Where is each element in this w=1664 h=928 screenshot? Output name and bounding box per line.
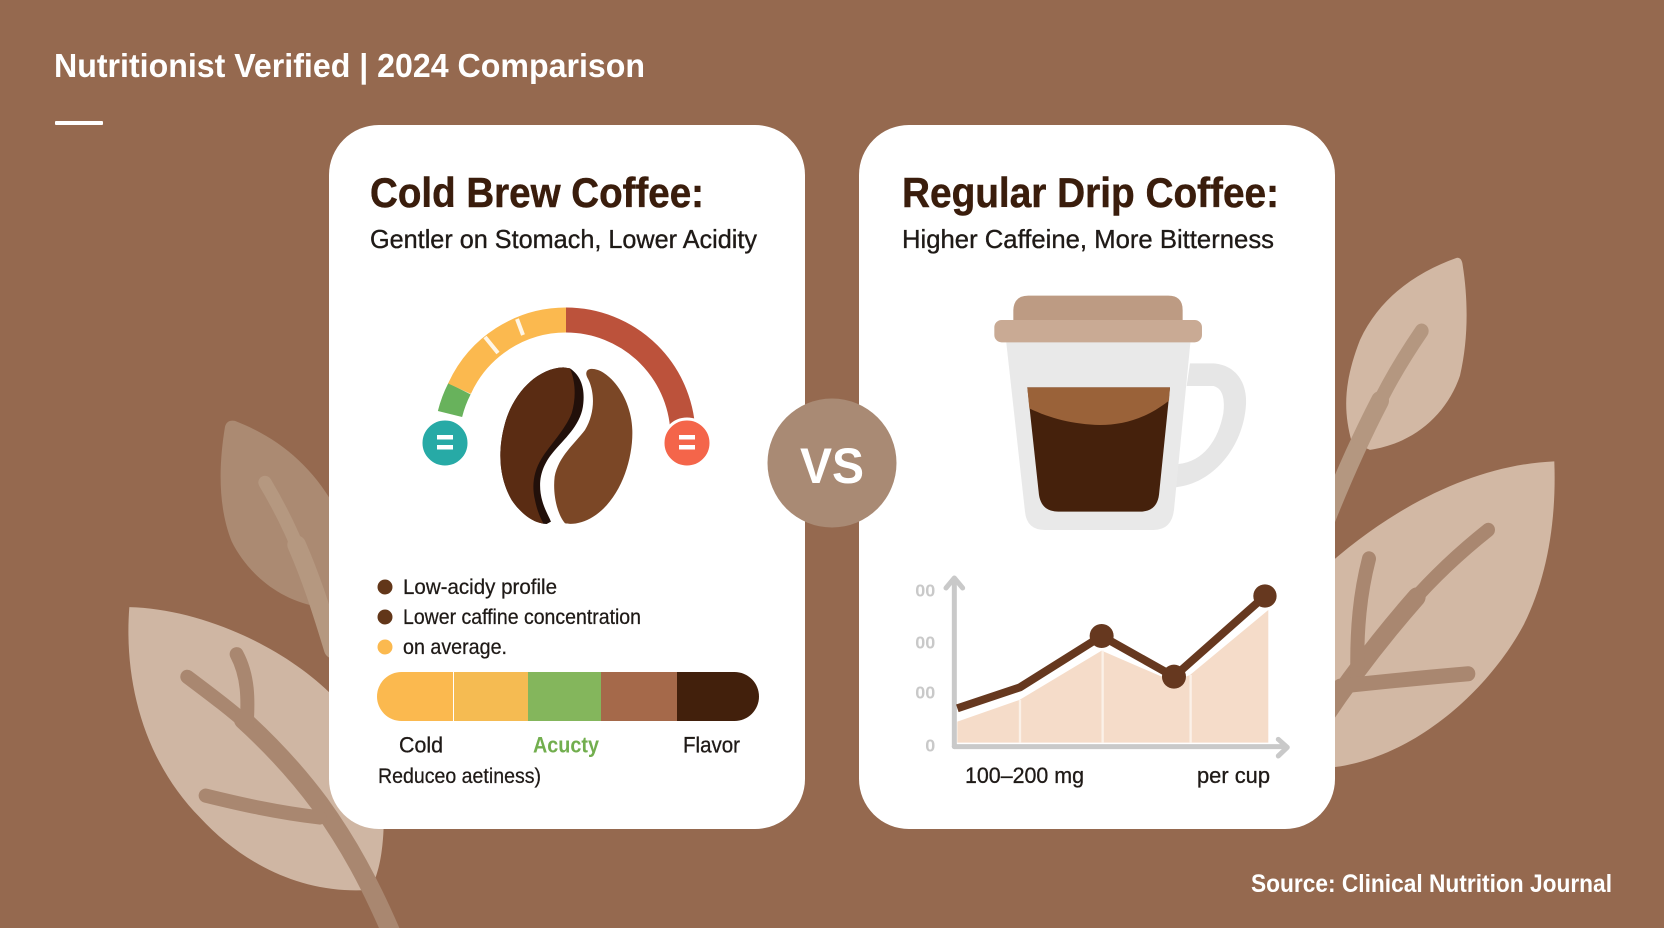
- bullet: low-acidy profile: Low-acidy profile: [403, 576, 557, 599]
- vs badge: VS: [800, 438, 864, 494]
- bullet: on average: on average.: [403, 636, 507, 659]
- caffeine line chart: [915, 578, 1287, 756]
- decorative leaves: left: [128, 421, 397, 928]
- heading: regular drip: Regular Drip Coffee:: [902, 169, 1279, 216]
- bar label: flavor: Flavor: [683, 732, 740, 758]
- decorative leaves: right: [1320, 258, 1555, 768]
- segmented flavor bar: [377, 672, 759, 721]
- acidity gauge: [421, 319, 711, 467]
- panel: cold brew coffee: [329, 125, 805, 829]
- subheading: cold brew: Gentler on Stomach, Lower Acidity: [370, 224, 757, 254]
- data line: [957, 584, 1277, 708]
- icon: coffee cup: [994, 296, 1246, 530]
- y axis labels: [915, 581, 935, 756]
- axes: [946, 578, 1287, 756]
- vs badge: [768, 398, 896, 528]
- y axis labels: 00: [915, 632, 935, 652]
- panel: regular drip coffee: [859, 125, 1335, 829]
- bullet: lower caffeine: Lower caffine concentration: [403, 606, 641, 629]
- subheading: regular drip: Higher Caffeine, More Bitterness: [902, 224, 1274, 254]
- chart label: per cup: per cup: [1197, 763, 1270, 788]
- title: Nutritionist Verified | 2024 Comparison: [54, 47, 645, 84]
- bar label: cold: Cold: [399, 732, 443, 758]
- bar note: Reduceo aetiness): [378, 765, 541, 788]
- area fill: [957, 610, 1268, 743]
- icon: red gauge end: [663, 419, 711, 467]
- y axis labels: 00: [915, 682, 935, 702]
- icon: teal gauge end: [421, 419, 469, 467]
- bar label: acidity: Acucty: [533, 732, 600, 758]
- bullet list: [378, 576, 641, 659]
- y axis labels: 0: [925, 736, 935, 756]
- title underline: [55, 121, 103, 125]
- icon: coffee bean: [500, 367, 632, 524]
- heading: cold brew: Cold Brew Coffee:: [370, 169, 704, 216]
- chart label: range: 100–200 mg: [965, 763, 1084, 788]
- source: Source: Clinical Nutrition Journal: [1251, 870, 1612, 898]
- y axis labels: 00: [915, 581, 935, 601]
